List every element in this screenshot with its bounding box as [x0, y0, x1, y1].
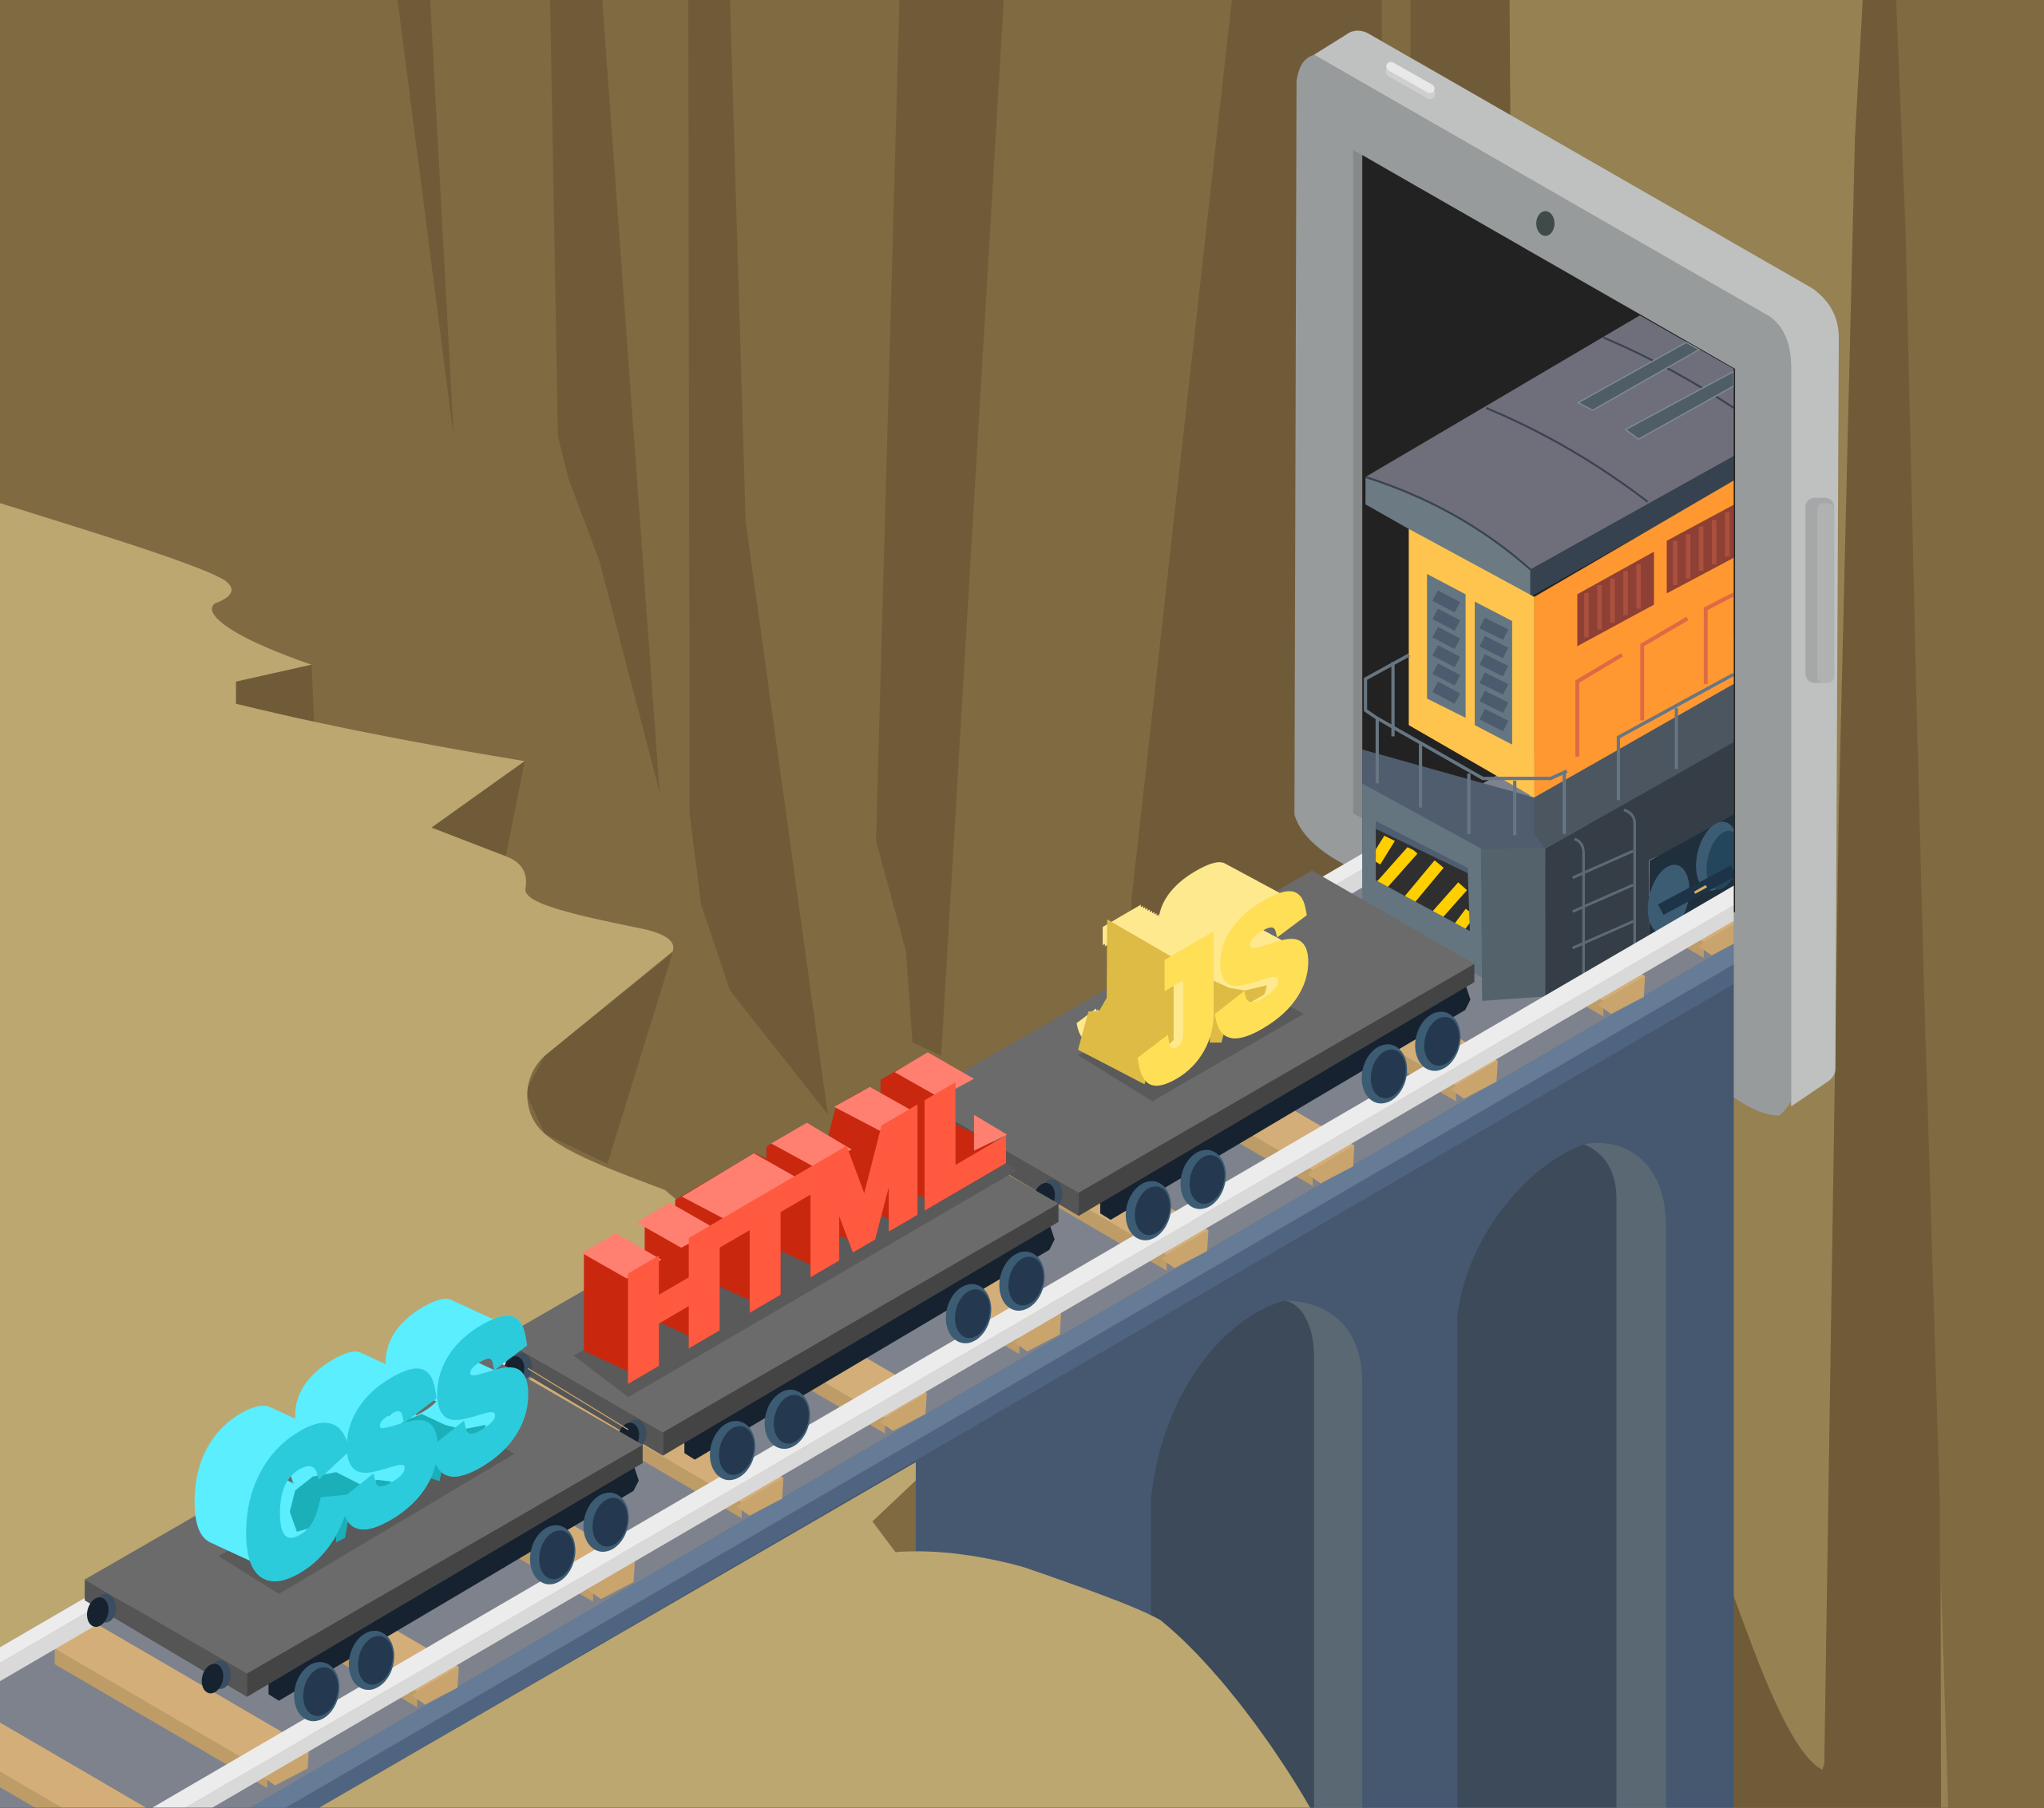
hazard panel: [1375, 821, 1471, 933]
word: JS cargo: JS: [1142, 849, 1308, 1126]
locomotive: [1362, 315, 1745, 1001]
sand terrain: foreground: [319, 1462, 1310, 1807]
letter shadow: html: [573, 1141, 1016, 1397]
bridge: [250, 944, 1733, 1807]
side button: [1805, 498, 1834, 683]
wagon: css: [84, 1351, 643, 1726]
screen: [1362, 155, 1735, 912]
arch: large: [1457, 1143, 1666, 1807]
word: CSS cargo: CSS: [248, 1273, 526, 1630]
arch: small: [1151, 1300, 1362, 1807]
near rail: [153, 886, 1733, 1807]
wagon: html: [500, 1110, 1059, 1485]
phone: [1294, 30, 1839, 1116]
word: CSS cargo: CSS: [248, 1273, 526, 1630]
sleepers: [0, 793, 1745, 1808]
wagon: js: [916, 871, 1475, 1245]
camera: [1536, 211, 1555, 236]
sand terrain: left: [0, 503, 730, 1694]
letter shadow: js: [1078, 984, 1304, 1102]
speaker: [1391, 66, 1430, 94]
word: HTML cargo: HTML: [624, 1029, 1004, 1411]
ladder: [1573, 810, 1634, 977]
handrails: [1365, 655, 1733, 836]
word: JS cargo: JS: [1142, 849, 1308, 1126]
engine side: [1535, 481, 1733, 797]
far rail: [0, 853, 1362, 1681]
word: HTML cargo: HTML: [624, 1029, 1004, 1411]
locomotive wheels: [1648, 822, 1734, 931]
track bed: [0, 637, 1733, 1807]
walkway and body: [1362, 684, 1733, 1001]
cab end: [1408, 529, 1535, 797]
cliff shadows: [236, 665, 672, 1164]
coupling line: [528, 1368, 628, 1430]
roof: [1365, 315, 1733, 597]
letter shadow: css: [219, 1427, 514, 1594]
